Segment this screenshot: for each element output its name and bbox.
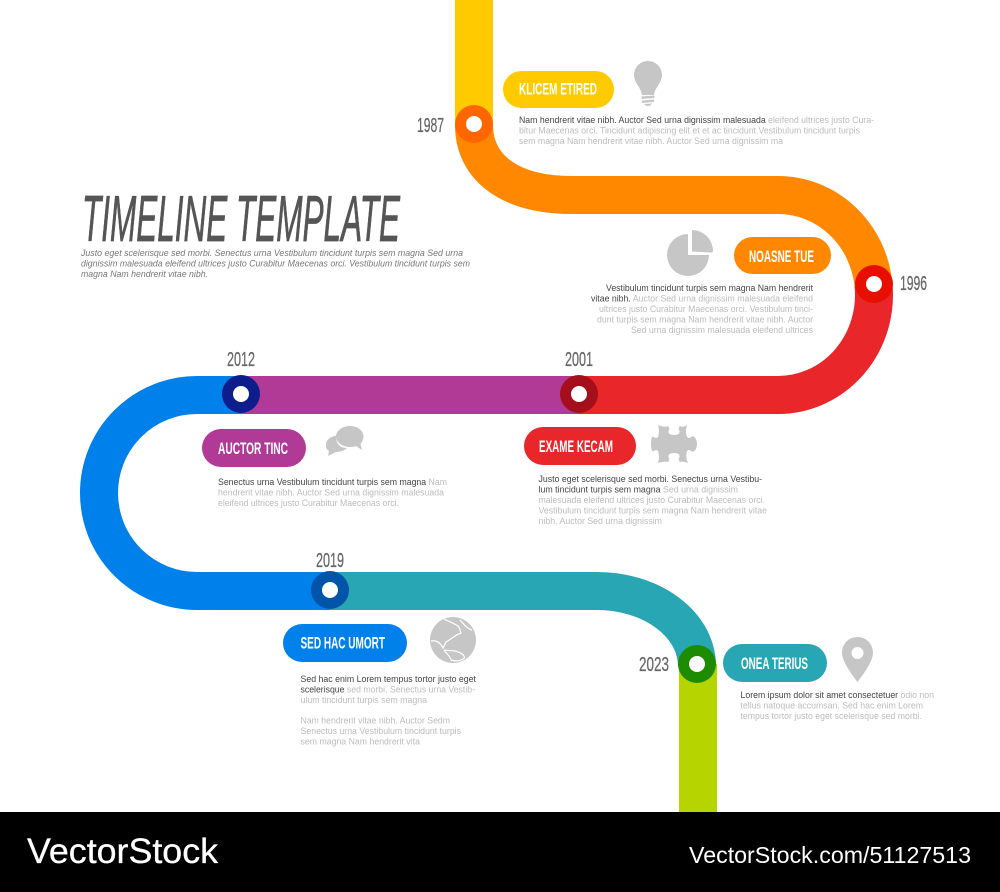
body text: Vestibulum tincidunt turpis sem magna Nam hendrerit vitae	[538, 506, 767, 516]
node: 1996	[855, 265, 893, 303]
intro text: magna Nam hendrerit vitae nibh.	[81, 269, 208, 279]
year 2023: 2023	[639, 654, 669, 676]
label pill	[283, 624, 407, 662]
body text: Justo eget scelerisque sed morbi. Senectus urna Vestibu-	[538, 474, 762, 484]
body text: sem magna Nam hendrerit vita	[300, 736, 420, 746]
footer bar	[0, 812, 1000, 892]
label pill	[723, 644, 827, 682]
icon: globe	[430, 617, 476, 663]
label pill: ONEA TERIUS	[741, 654, 808, 673]
label pill	[503, 71, 614, 108]
year 1996: 1996	[900, 273, 927, 295]
node: 1987	[455, 105, 493, 143]
body text: Lorem ipsum dolor sit amet consectetuer odio non	[740, 690, 934, 700]
body text: eleifend ultrices justo Curabitur Maecenas orci.	[218, 498, 399, 508]
body text: nibh. Auctor Sed urna dignissim	[538, 516, 662, 526]
section: Exame Kecam	[524, 425, 767, 526]
body text	[218, 477, 447, 508]
body text: Sed urna dignissim malesuada eleifend ultrices	[631, 325, 813, 335]
label pill: AUCTOR TINC	[218, 439, 288, 458]
section: Onea Terius	[723, 637, 934, 721]
body text: Vestibulum tincidunt turpis sem magna Nam hendrerit	[606, 283, 813, 293]
label pill: SED HAC UMORT	[300, 634, 385, 652]
body text: sem magna Nam hendrerit vitae nibh. Auctor Sed urna dignissim ma	[519, 136, 783, 146]
body text	[740, 690, 934, 721]
body text	[538, 474, 767, 526]
icon: light bulb	[634, 61, 662, 106]
footer url: VectorStock.com/51127513	[689, 842, 971, 868]
node: 2019	[311, 571, 349, 609]
section: Sed Hac Umort	[283, 617, 476, 746]
label pill: NOASNE TUE	[749, 247, 814, 266]
section: Auctor Tinc	[202, 426, 447, 508]
body text: malesuada eleifend ultrices justo Curabitur Maecenas orci.	[538, 495, 765, 505]
body text: scelerisque sed morbi. Senectus urna Vestib-	[300, 684, 475, 694]
year 1987: 1987	[417, 115, 444, 137]
year 2019: 2019	[316, 550, 344, 572]
body text: Senectus urna Vestibulum tincidunt turpis	[300, 726, 461, 736]
body text	[591, 283, 813, 335]
icon: chat bubbles	[326, 426, 364, 456]
label pill: EXAME KECAM	[539, 437, 613, 456]
body text: lum tincidunt turpis sem magna Sed urna dignissim	[538, 484, 738, 494]
footer logo text: VectorStock	[27, 832, 219, 871]
intro text	[80, 248, 470, 279]
label pill	[734, 237, 831, 274]
node: 2023	[678, 645, 716, 683]
body text: tellus natoque accumsan. Sed hac enim Lorem	[740, 700, 923, 710]
body text: ultrices justo Curabitur Maecenas orci. Vestibulum tinci-	[599, 304, 813, 314]
body text: dunt turpis sem magna Nam hendrerit vitae nibh. Auctor	[597, 314, 813, 324]
body text: Sed hac enim Lorem tempus tortor justo eget	[300, 674, 476, 684]
section: Noasne Tue	[591, 230, 831, 335]
infographic canvas: TIMELINE TEMPLATE	[82, 182, 400, 255]
label pill	[524, 427, 636, 465]
label pill: KLICEM ETIRED	[519, 80, 597, 98]
year 2012: 2012	[227, 349, 255, 371]
body text: hendrerit vitae nibh. Auctor Sed urna dignissim malesuada	[218, 488, 444, 498]
body text: Nam hendrerit vitae nibh. Auctor Sedm	[300, 716, 450, 726]
body text: Nam hendrerit vitae nibh. Auctor Sed urna dignissim malesuada eleifend ultrices justo Cura-	[519, 115, 874, 125]
body text: vitae nibh. Auctor Sed urna dignissim malesuada eleifend	[591, 294, 813, 304]
intro text: dignissim malesuada eleifend ultrices justo Curabitur Maecenas orci. Vestibulum tincidunt turpis sem	[81, 258, 470, 268]
body text	[519, 115, 874, 146]
intro text: Justo eget scelerisque sed morbi. Senectus urna Vestibulum tincidunt turpis sem magna Sed urna	[80, 248, 463, 258]
icon: puzzle piece	[651, 425, 697, 463]
body text: tempus tortor justo eget scelerisque sed morbi.	[740, 711, 922, 721]
icon: map pin	[842, 637, 873, 682]
body text: Senectus urna Vestibulum tincidunt turpis sem magna Nam	[218, 477, 447, 487]
icon: pie chart	[667, 230, 713, 276]
node: 2012	[222, 375, 260, 413]
body text: bitur Maecenas orci. Tincidunt adipiscing elit et et ac tincidunt.Vestibulum tincidunt turpis	[519, 126, 860, 136]
section: Klicem Etired	[503, 61, 874, 146]
timeline path	[99, 0, 874, 812]
year 2001: 2001	[565, 349, 593, 371]
body text	[300, 674, 476, 746]
node: 2001	[560, 375, 598, 413]
label pill	[202, 429, 306, 467]
body text: ulum tincidunt turpis sem magna	[300, 695, 427, 705]
